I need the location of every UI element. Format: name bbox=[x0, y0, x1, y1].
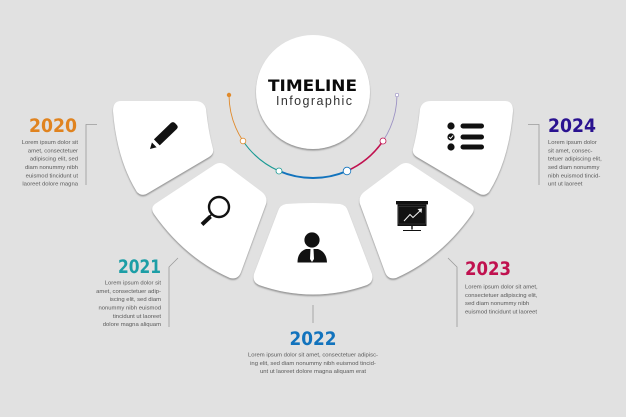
year 2020: 2020 bbox=[29, 115, 77, 137]
panel: 2021 card bbox=[152, 163, 266, 278]
panel: 2024 card bbox=[413, 101, 513, 195]
title: TIMELINE bbox=[268, 76, 357, 95]
block: 2022 bbox=[248, 328, 378, 375]
block: 2020 bbox=[22, 115, 79, 188]
block: 2023 bbox=[465, 258, 538, 316]
text 2021: Lorem ipsum dolor sit bbox=[105, 280, 161, 286]
leader 2021 bbox=[169, 258, 178, 327]
leader 2024 bbox=[528, 124, 539, 185]
text 2024: sit amet, consec- bbox=[548, 148, 593, 154]
panel: 2020 card bbox=[113, 101, 213, 195]
text 2021: amet, consectetuer adip- bbox=[96, 289, 161, 295]
year 2022: 2022 bbox=[290, 328, 336, 350]
icon: magnifier bbox=[202, 197, 229, 224]
text 2020: diam nonummy nibh bbox=[25, 165, 78, 171]
text 2021: nonummy nibh euismod bbox=[98, 306, 161, 312]
text 2022: unt ut laoreet dolore magna aliquam erat bbox=[260, 369, 366, 375]
block: 2024 bbox=[548, 115, 602, 188]
text 2020: Lorem ipsum dolor sit bbox=[22, 140, 78, 146]
subtitle: Infographic bbox=[276, 94, 352, 108]
text 2021: iscing elit, sed diam bbox=[110, 297, 161, 303]
year 2023: 2023 bbox=[465, 258, 511, 280]
panel: 2022 card bbox=[254, 203, 372, 294]
text 2020: euismod tincidunt ut bbox=[26, 173, 78, 179]
icon: presentation board bbox=[396, 201, 428, 230]
leader 2022 bbox=[312, 305, 314, 323]
text 2020: laoreet dolore magna bbox=[22, 182, 79, 188]
text 2023: Lorem ipsum dolor sit amet, bbox=[465, 284, 538, 290]
year 2021: 2021 bbox=[118, 256, 161, 278]
text 2024: unt ut laoreet bbox=[548, 182, 583, 188]
text 2023: euismod tincidunt ut laoreet bbox=[465, 310, 537, 316]
text 2021: dolore magna aliquam bbox=[103, 322, 161, 328]
text 2020: amet, consectetuer bbox=[28, 148, 78, 154]
panel: 2023 card bbox=[360, 163, 474, 278]
year 2024: 2024 bbox=[548, 115, 596, 137]
text 2020: adipiscing elit, sed bbox=[30, 157, 78, 163]
text 2024: nibh euismod tincid- bbox=[548, 173, 600, 179]
text 2024: tetuer adipiscing elit, bbox=[548, 157, 602, 163]
leader 2023 bbox=[448, 258, 457, 327]
icon: pencil bbox=[147, 121, 179, 152]
icon: person bbox=[298, 232, 327, 262]
text 2024: sed diam nonummy bbox=[548, 165, 599, 171]
text 2023: sed diam nonummy nibh bbox=[465, 301, 529, 307]
text 2022: Lorem ipsum dolor sit amet, consectetuer adipisc- bbox=[248, 352, 378, 358]
text 2024: Lorem ipsum dolor bbox=[548, 140, 597, 146]
leader 2020 bbox=[86, 124, 97, 185]
text 2021: tincidunt ut laoreet bbox=[113, 314, 161, 320]
icon: checklist bbox=[447, 122, 484, 151]
text 2022: ing elit, sed diam nonummy nibh euismod tincid- bbox=[250, 361, 376, 367]
arc timeline bbox=[227, 93, 399, 178]
title circle bbox=[256, 35, 370, 149]
text 2023: consectetuer adipiscing elit, bbox=[465, 293, 538, 299]
block: 2021 bbox=[96, 256, 161, 328]
